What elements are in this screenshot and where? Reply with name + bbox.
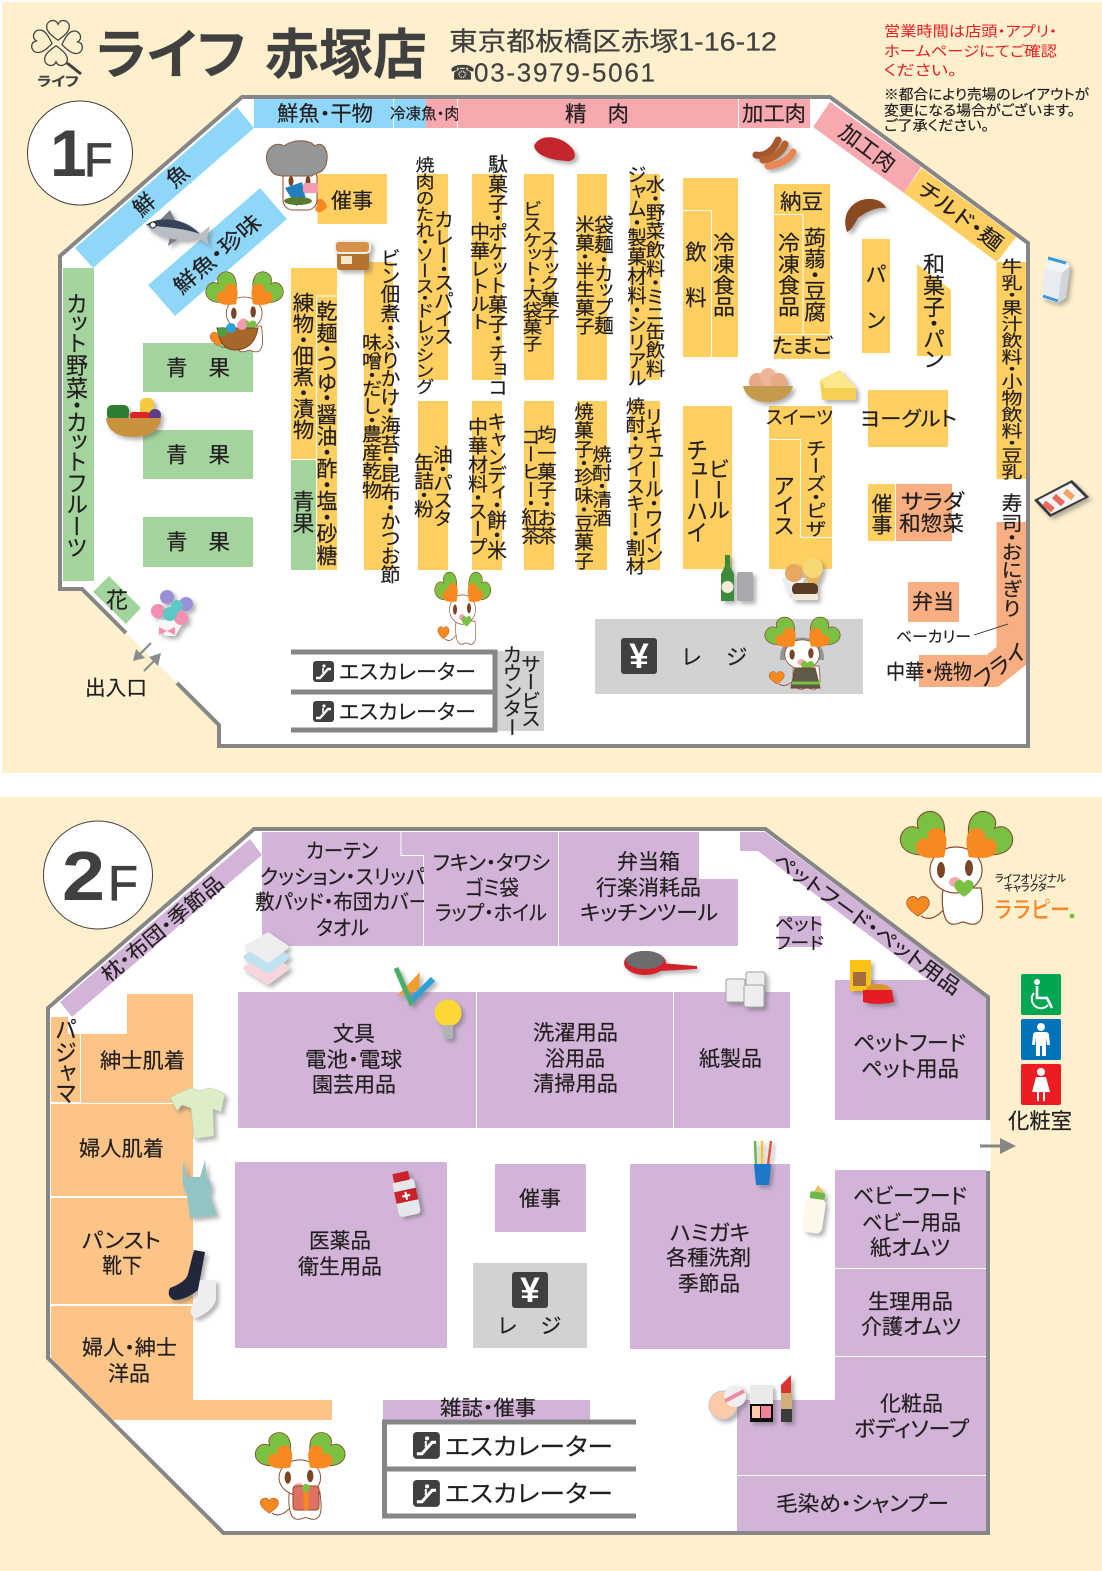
zone: 化粧品: 化粧品 [880,1393,943,1416]
zone: フキン ゴミ袋 [402,832,558,946]
caption: character name: キャラクター [1004,882,1056,894]
mascot: Lalapy character [895,806,1018,924]
icon: sushi tray [1034,480,1089,517]
zone: 催事 2F [495,1164,586,1232]
mascot: gift [251,1428,349,1519]
zone: 催事 vertical: 催事 [869,493,892,535]
icon: bouquet [151,590,193,636]
caption: character name: ライフオリジナル [995,873,1066,885]
icon: toilet paper [726,972,765,1007]
shelf: カレー 焼肉のたれ: 焼肉のたれ・ソース・ドレッシング [412,156,434,395]
icon: stationery [396,968,433,1005]
zone: スイーツ アイス チーズ: チーズ・ピザ [803,439,826,538]
icon: ice cream [782,558,823,600]
zone: 冷凍魚・肉 [390,99,460,128]
shelf: 焼菓子 焼酎 [570,401,611,570]
icon: eggs [743,368,793,402]
zone: チルド・麺 [904,168,1016,262]
zone: 催事 vertical [868,484,895,541]
zone: パン [862,239,890,353]
shelf: 焼菓子 焼酎: 焼菓子・珍味・豆菓子 [570,402,593,570]
shelf: リキュール 焼酎: リキュール・ワイン [640,407,662,563]
zone: ペットフード small: ペット [775,915,823,934]
zone: 婦人・紳士洋品: 洋品 [108,1363,150,1386]
zone: ビール チューハイ [683,406,732,569]
zone: サービスカウンター: サービス [518,655,540,727]
shelf: 駄菓子 中華レトルト: 中華レトルト [466,222,488,330]
zone: 加工肉 diagonal [813,102,921,193]
zone: 枕・布団・季節品 [60,839,262,1017]
escalators 2F [384,1422,636,1516]
zone: サラダ 和惣菜: 和惣菜 [899,513,964,536]
floor 2 background panel [0,797,1102,1571]
zone: 文具 [238,992,476,1128]
zone: カーテン タオル: クッション・スリッパ [260,866,425,889]
notice: layout may change: ※都合により売場のレイアウトが [884,86,1089,102]
zone: ペットフード ペット用品: ペットフード [853,1032,966,1056]
zone: ビール チューハイ: ビール [705,458,730,520]
zone: 毛染め・シャンプー: 毛染め・シャンプー [776,1493,949,1516]
zone: スイーツ アイス チーズ: アイス [770,474,795,536]
zone: 青果 2: 青 果 [166,444,230,468]
zone: 化粧品 [737,1357,986,1475]
shelf: カレー 焼肉のたれ: カレー・スパイス [430,210,452,345]
zone: ハミガキ: 季節品 [678,1273,740,1296]
mascot: register [761,614,844,689]
mascot: vegetable basket [202,268,287,352]
zone: ベビーフード: 紙オムツ [870,1237,950,1260]
title: ライフ [96,26,246,86]
zone: レジ 2F: レ ジ [498,1315,561,1338]
icon: pet food [850,960,894,1004]
zone: レジ 2F [473,1263,587,1348]
zone: 医薬品: 衛生用品 [298,1256,382,1279]
zone: 寿司・フライ・中華: 寿司・おにぎり [999,493,1022,617]
zone: 洗濯用品 [477,992,673,1128]
icon: baby bottle [802,1185,826,1234]
zone: 加工肉 top: 加工肉 [742,103,806,126]
zone: 紳士肌着 [81,994,193,1103]
zone: ペットフード small [775,915,824,953]
zone: 精肉 [458,99,738,128]
zone: 弁当箱 [559,832,738,946]
icon: light bulb [434,1000,462,1039]
icon: yen [621,637,657,676]
zone: ヨーグルト [860,390,957,447]
zone: 催事: 催事 [331,190,373,213]
zone: 納豆 蒟蒻 冷凍 たまご: 冷凍食品 [775,232,800,317]
zone: 弁当箱: 行楽消耗品 [596,877,701,900]
shelf: リキュール 焼酎 [622,397,662,575]
shelf: 練物 乾麺 青果: 青果 [290,490,314,534]
icon: escalator [313,661,334,682]
icon: toothbrushes [754,1141,771,1185]
zone: 紳士肌着: 紳士肌着 [100,1050,185,1073]
shelf: リキュール 焼酎: 焼酎・ウイスキー・割材 [622,397,645,575]
icon: beer [721,555,753,601]
zone: 飲料 冷凍食品: 冷凍食品 [710,232,735,317]
arrow: to restroom [980,1138,1016,1154]
arrow: entrance [144,653,161,671]
notice: layout may change: ご了承ください。 [884,118,989,134]
zone: 弁当 [908,582,959,622]
shelf: 練物 乾麺 青果: 乾麺・つゆ・醤油・酢・塩・砂糖 [314,300,338,566]
zone: 花 [93,576,141,624]
zone: 花: 花 [106,588,128,613]
zone: カーテン タオル: 敷パッド・布団カバー [255,891,428,914]
zone: 婦人肌着 [51,1104,193,1196]
shelf: 油 パスタ 缶詰 [410,401,452,570]
zone: 牛乳・果汁飲料 [996,258,1026,480]
shelf: 袋麺 米菓: 米菓・半生菓子 [572,215,594,335]
zone: サービスカウンター [497,645,544,736]
zone: 飲料 冷凍食品 [682,178,738,357]
zone: 医薬品: 医薬品 [309,1230,371,1253]
zone: 弁当箱: 弁当箱 [617,851,680,874]
shelf: 均一菓子 コーヒー: 均一菓子・お茶 [534,425,556,545]
zone: 文具: 電池・電球 [305,1049,402,1072]
zone: 婦人・紳士洋品 [51,1306,332,1420]
title [96,26,427,86]
shelf: 水 ジャム [624,165,665,387]
label: 出入口: 出入口 [85,677,147,700]
zone: 雑誌・催事 [383,1397,590,1420]
zone: サービスカウンター: カウンター [499,645,521,736]
shelf: ビン佃煮 味噌: ビン佃煮・ふりかけ・海苔・昆布・かつお節 [377,248,400,584]
icon: men's restroom [1021,1019,1061,1060]
notice: opening hours: ください。 [884,62,957,80]
notice: layout may change [884,86,1089,134]
zone: カーテン タオル: カーテン [306,840,378,863]
shelf: 駄菓子 中華レトルト: 駄菓子・ポケット菓子・チョコ [484,154,508,396]
icon: escalator 2 [313,701,334,722]
mascot: chef [266,141,329,214]
icon: camisole [183,1160,217,1218]
shelf: 水 ジャム: 水・野菜飲料・ミニ缶飲料 [642,175,665,378]
floor 2 white floor [48,829,988,1533]
icon: yen 2F: ¥ [520,1271,540,1310]
floor 1 outer wall [60,97,1028,746]
icon: medicine [390,1170,421,1218]
zone: 納豆 蒟蒻 冷凍 たまご: 蒟蒻・豆腐 [801,227,826,322]
label: エスカレーター 2F second: エスカレーター [445,1481,613,1508]
shelf: ビン佃煮 味噌: 味噌・だし・農産乾物 [358,333,382,499]
zone: スイーツ アイス チーズ: スイーツ [766,407,833,428]
shelf: 練物 乾麺 青果 [290,268,338,570]
zone: 寿司・フライ・中華: 中華・焼物 [886,661,972,684]
zone: ハミガキ: ハミガキ [670,1222,750,1246]
logo: Life clover: ライフ [37,74,79,89]
zone: 婦人肌着: 婦人肌着 [79,1138,164,1161]
notice: opening hours: 営業時間は店頭・アプリ・ [884,24,1057,40]
icon: women's restroom [1021,1064,1061,1105]
zone: 青果 1 [143,343,253,392]
title: 赤塚店 [265,26,427,86]
zone: 鮮魚 [75,107,254,268]
zone: ペットフード small: フード [775,934,824,953]
phone number: ☎ [450,60,475,84]
zone: 弁当箱: キッチンツール [580,902,718,925]
notice: layout may change: 変更になる場合がございます。 [884,102,1075,118]
zone: パンスト: パンスト [82,1230,161,1253]
circle badge 2F: F [108,857,138,911]
zone: チルド・麺: チルド・麺 [913,177,1007,256]
zone: 牛乳・果汁飲料: 牛乳・果汁飲料・小物飲料・豆乳 [999,258,1022,480]
icon: milk carton [1042,256,1070,303]
zone: 青果 3: 青 果 [166,530,230,554]
zone: 和菓子・パン: 和菓子・パン [920,253,945,368]
zone: 納豆 蒟蒻 冷凍 たまご [772,184,833,359]
icon: tuna [146,210,210,246]
icon: wheelchair restroom [1021,974,1061,1015]
shelf: 駄菓子 中華レトルト [466,154,508,396]
shelf: 水 ジャム: ジャム・製菓材料・シリアル [624,165,646,387]
zone: ベビーフード: ベビーフード [853,1184,967,1208]
caption: character name [994,873,1074,922]
shelf: ビスケット スナック: スナック菓子 [536,230,559,325]
zone: 文具: 園芸用品 [312,1074,396,1097]
zone: 洗濯用品: 清掃用品 [533,1073,618,1096]
zone: 弁当: 弁当 [912,591,954,614]
zone: 飲料 冷凍食品: 飲 料 [682,241,706,308]
zone: 雑誌・催事: 雑誌・催事 [440,1397,536,1420]
zone: 寿司・フライ・中華 [886,493,1031,693]
shelf: 練物 乾麺 青果: 練物・佃煮・漬物 [290,292,314,440]
floor 1 plan [28,97,1089,746]
zone: 文具: 文具 [333,1023,375,1046]
zone: スイーツ アイス チーズ [766,406,833,569]
icon: escalator 2F second [413,1480,440,1507]
shelf: 均一菓子 コーヒー: コーヒー・紅茶 [518,427,540,545]
zone: 枕・布団・季節品: 枕・布団・季節品 [97,871,228,987]
zone: フキン ゴミ袋: ゴミ袋 [465,877,519,900]
icon: vegetable basket [106,398,161,437]
zone: 生理用品 [835,1269,986,1356]
zone: パンスト [51,1198,193,1304]
zone: 催事 [318,174,387,224]
zone: 洗濯用品: 浴用品 [545,1048,605,1071]
zone: 鮮魚・干物: 鮮魚・干物 [277,103,373,126]
zone: 毛染め・シャンプー [737,1476,986,1532]
icon: socks [169,1250,216,1318]
zone: 加工肉 diagonal: 加工肉 [834,120,900,177]
notice: opening hours [884,24,1058,80]
shelf: カレー 焼肉のたれ [412,156,452,395]
shelf: 油 パスタ 缶詰: 缶詰・粉 [410,453,434,518]
circle badge 2F: 2 [62,837,105,915]
label: 化粧室: 化粧室 [1008,1110,1072,1134]
zone: ペットフード ペット用品: ペットフード・ペット用品 [769,849,964,1000]
zone: 医薬品 [235,1162,447,1348]
zone: パジャマ: パジャマ [52,1018,77,1104]
zone: カーテン タオル: タオル [316,917,369,940]
zone: ペットフード ペット用品 [740,832,986,1120]
icon: escalator 2F [413,1432,440,1459]
zone: 鮮魚・干物 [254,99,393,128]
label: ベーカリー [896,624,1008,646]
opening to restroom [835,1121,991,1169]
label: エスカレーター: エスカレーター [339,661,476,684]
icon: cheese [820,370,856,400]
zone: 鮮魚: 鮮 魚 [128,159,194,222]
icon: yen: ¥ [629,637,649,676]
zone: 生理用品: 介護オムツ [861,1316,961,1339]
shelf: キャンディ 中華材料 [464,401,506,570]
zone: カット野菜: カット野菜・カットフルーツ [63,292,88,557]
zone: カット野菜 [63,268,94,581]
mascot: clover 1F [432,569,494,644]
icon: frying pan [624,951,697,975]
zone: ベビーフード: ベビー用品 [862,1212,961,1235]
floor 1 background panel [2,2,1102,773]
shelf: 袋麺 米菓: 袋麺・カップ麺 [590,215,613,335]
address: 東京都板橋区赤塚1-16-12 [449,26,777,56]
shelf: ビン佃煮 味噌 [358,248,400,584]
zone: レジ [595,619,863,694]
zone: 精肉: 精 肉 [565,102,629,126]
notice: opening hours: ホームページにてご確認 [884,44,1058,60]
zone: ペットフード ペット用品: ペット用品 [861,1058,959,1082]
shelf: 油 パスタ 缶詰: 油・パスタ [430,445,452,527]
shelf: ビスケット スナック: ビスケット・大袋菓子 [519,200,542,352]
arrow: exit [133,643,151,661]
zone: 寿司・フライ・中華: フライ [971,640,1031,693]
zone: 青果 2 [143,430,253,479]
icon: meat [534,137,575,161]
zone: 生理用品: 生理用品 [868,1291,953,1314]
zone: 化粧品: ボディソープ [854,1418,970,1442]
circle badge 1F: 1 [50,116,87,190]
shelf: 袋麺 米菓 [572,174,613,380]
zone: 鮮魚・珍味 [148,188,287,316]
circle badge 1F [28,101,132,205]
escalators [291,652,495,730]
zone: 冷凍魚・肉: 冷凍魚・肉 [390,105,460,123]
caption: character name: ララピー [994,896,1070,922]
floor 2 outer wall [48,829,988,1533]
zone: 洗濯用品: 洗濯用品 [533,1022,618,1045]
zone: 紙製品 [674,992,790,1128]
icon: cosmetics [709,1375,792,1422]
shelf: キャンディ 中華材料: キャンディ・餅・米 [484,412,506,560]
icon: t-shirt [170,1088,225,1139]
shelf: ビスケット スナック [519,174,559,380]
zone: ビール チューハイ: チューハイ [683,438,708,543]
phone number: 03-3979-5061 [474,58,655,88]
zone: パンスト: 靴下 [102,1255,142,1278]
zone: 催事 2F: 催事 [519,1188,561,1211]
zone: 紙製品: 紙製品 [699,1048,762,1071]
zone: 婦人・紳士洋品: 婦人・紳士 [82,1337,177,1360]
zone: 納豆 蒟蒻 冷凍 たまご: たまご [772,335,833,358]
zone: フキン ゴミ袋: ラップ・ホイル [435,902,547,925]
icon: sausages [756,140,793,166]
label: エスカレーター 2: エスカレーター [339,701,476,724]
zone: パン: パ ン [862,264,886,329]
icon: miso [335,241,370,270]
zone: 青果 1: 青 果 [166,356,230,380]
zone: 鮮魚・珍味: 鮮魚・珍味 [169,210,266,299]
zone: ハミガキ: 各種洗剤 [666,1247,751,1270]
zone: ベビーフード [835,1170,986,1268]
circle badge 2F [44,821,152,929]
zone: レジ: レ ジ [682,646,747,670]
zone: カーテン タオル [255,832,428,946]
zone: 納豆 蒟蒻 冷凍 たまご: 納豆 [780,191,823,214]
zone: サラダ 和惣菜: サラダ [901,491,966,514]
shelf: 均一菓子 コーヒー [518,401,556,570]
zone: サラダ 和惣菜 [896,484,966,541]
floor 2 plan [44,806,1074,1533]
zone: ヨーグルト: ヨーグルト [860,408,957,431]
shelf: キャンディ 中華材料: 中華材料・スープ [464,417,488,555]
icon: croissant [845,199,886,232]
shelf: 焼菓子 焼酎: 焼酎・清酒 [588,445,611,527]
zone: フキン ゴミ袋: フキン・タワシ [433,852,550,875]
circle badge 1F: F [84,133,113,186]
icon: towels [246,935,287,982]
label: エスカレーター 2F: エスカレーター [445,1434,613,1461]
floor 1 white floor [60,97,1028,746]
label: ベーカリー: ベーカリー [896,629,971,646]
zone: 青果 3 [143,517,253,567]
zone: ハミガキ [630,1164,790,1349]
logo: Life clover [31,20,83,89]
